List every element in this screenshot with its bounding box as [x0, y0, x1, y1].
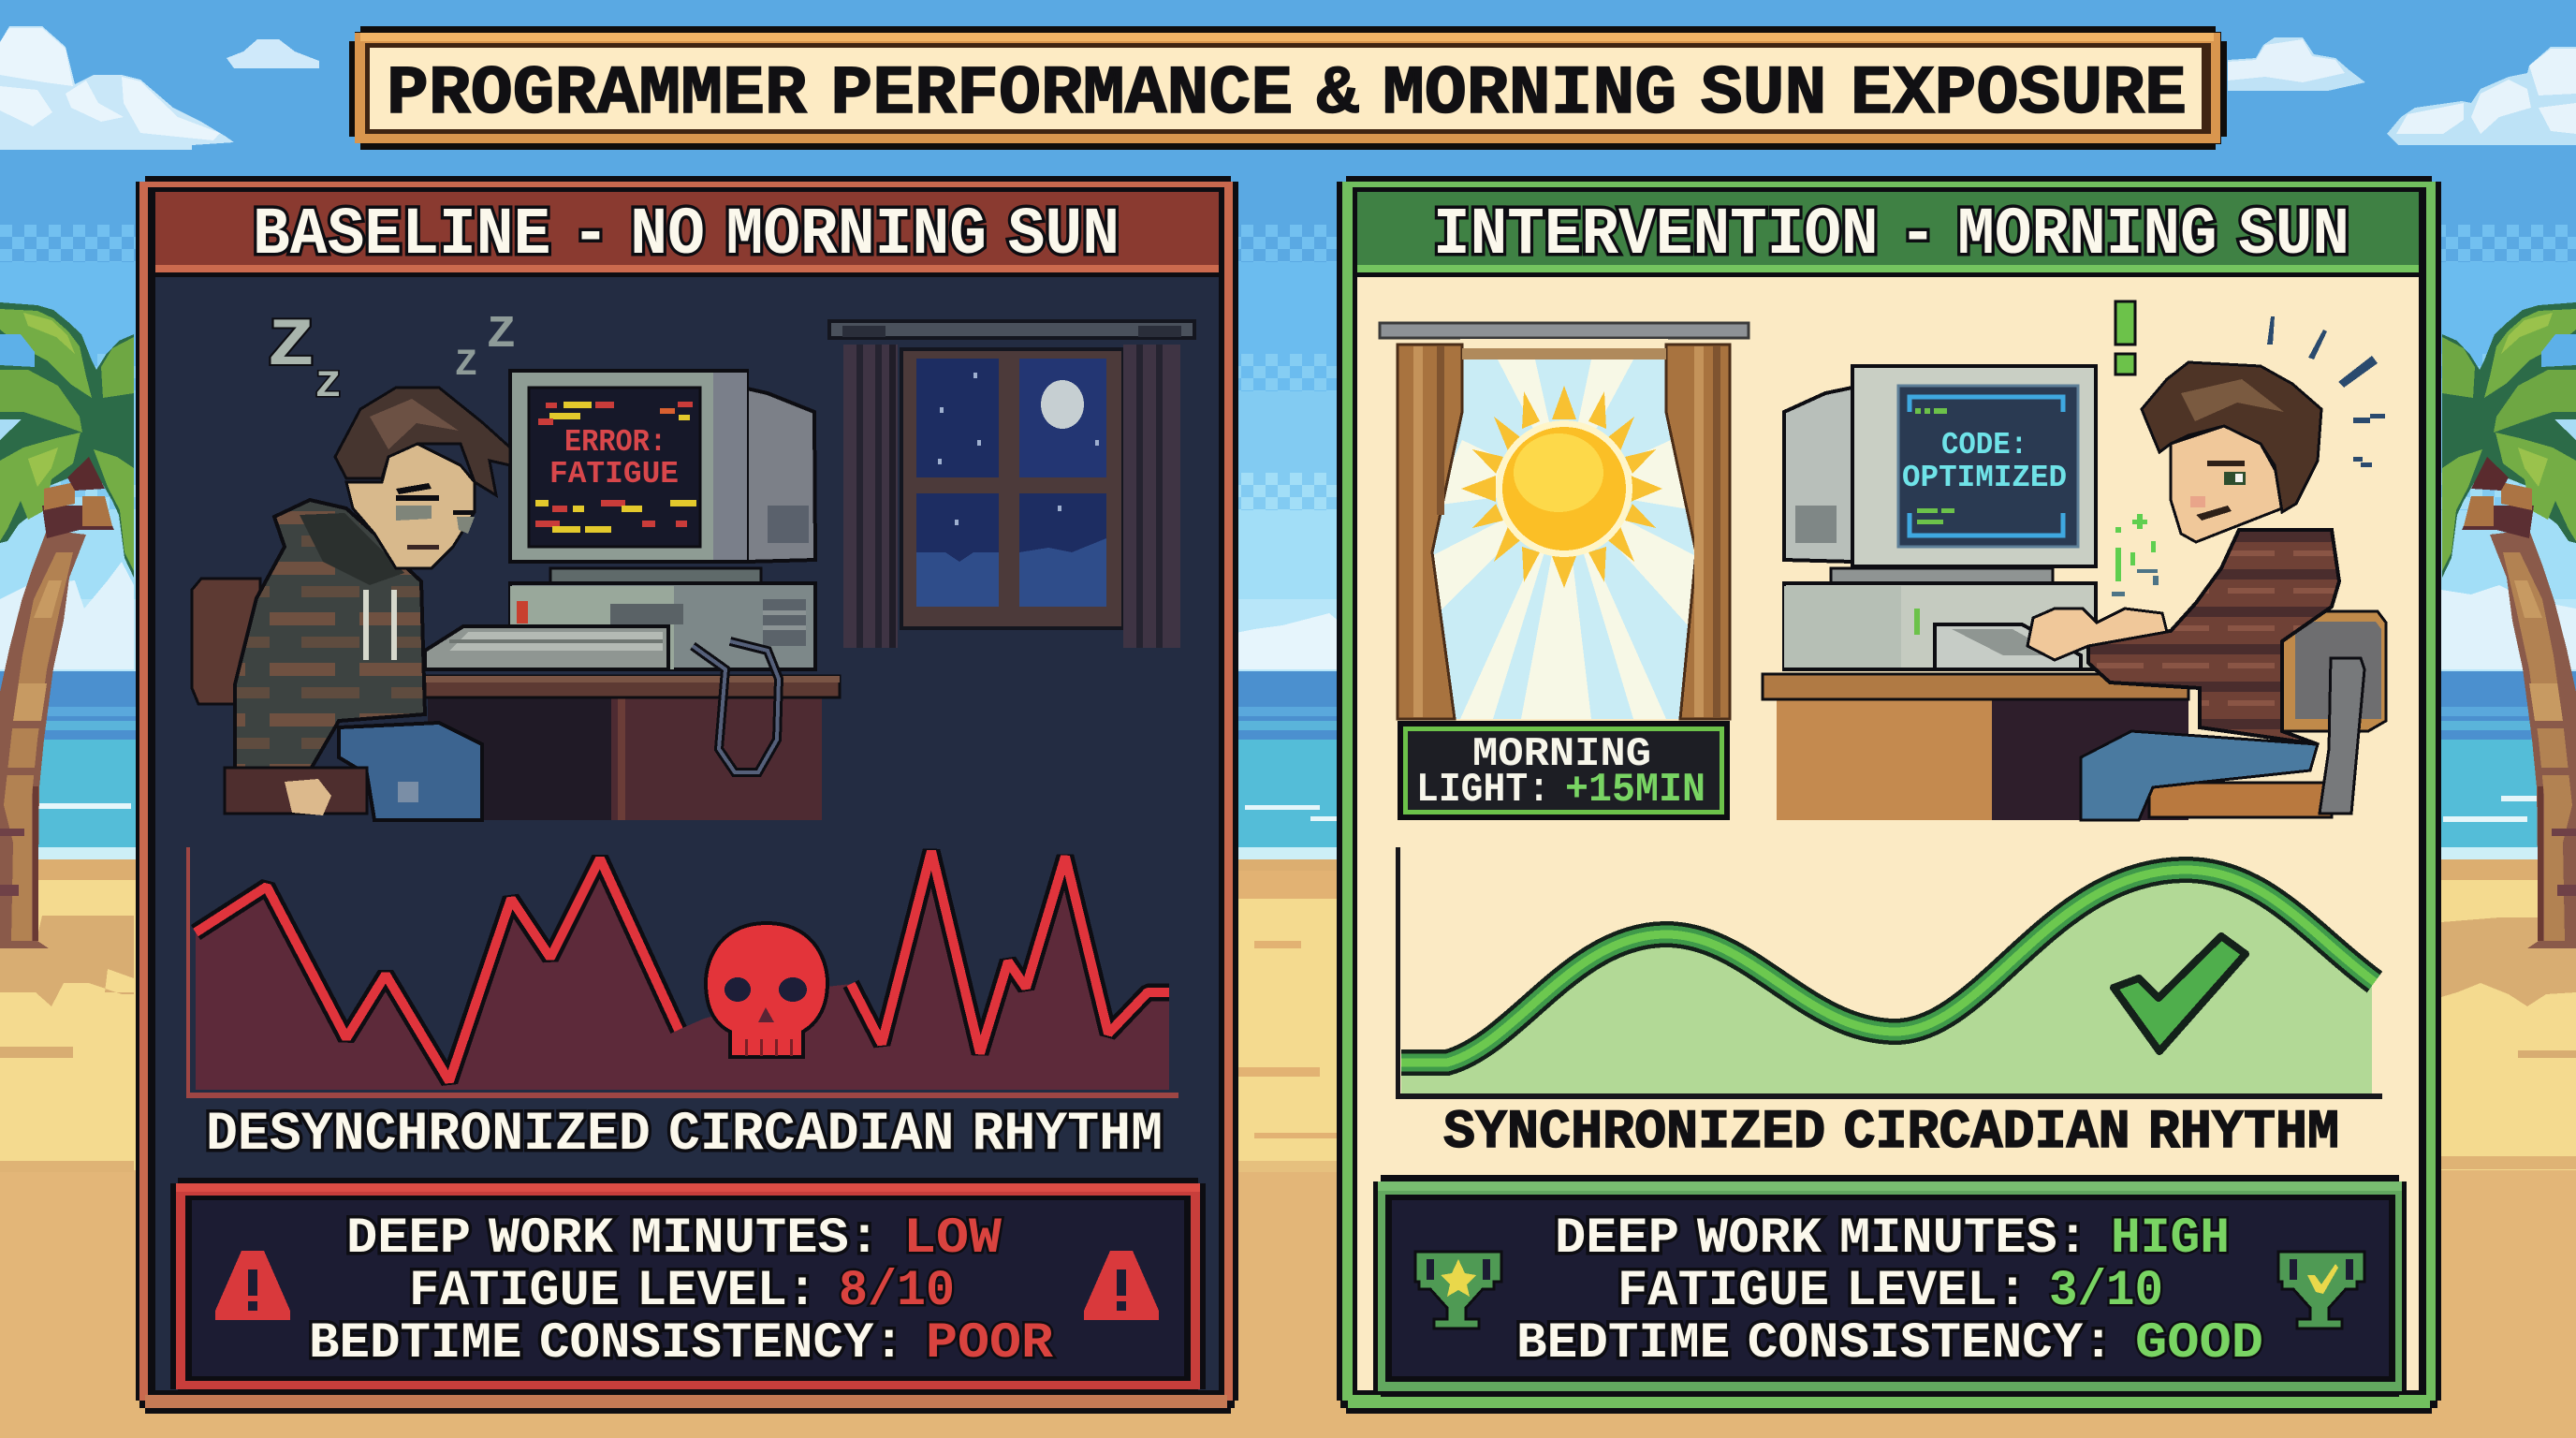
- stat: deep work high: DEEP WORK MINUTES:: [1555, 1211, 2088, 1268]
- computer tower: intervention: [1784, 568, 2096, 669]
- palm tree: left: [0, 302, 134, 948]
- panel header: baseline: [155, 192, 1219, 277]
- chart: synchronized rhythm: [1396, 847, 2382, 1099]
- screen text: error fatigue: [549, 425, 679, 492]
- chart caption: synchronized: SYNCHRONIZED CIRCADIAN RHYTHM: [1443, 1103, 2339, 1164]
- screen text: code optimized: CODE:: [1941, 428, 2027, 462]
- desk: intervention: [1763, 674, 2188, 820]
- panel: intervention - morning sun: [1337, 176, 2441, 1414]
- monitor: code optimized: [1784, 366, 2096, 566]
- stat: bedtime poor: BEDTIME CONSISTENCY:: [309, 1315, 904, 1372]
- icon: trophy star: [1415, 1252, 1501, 1328]
- sleep z letters: Z: [455, 345, 477, 387]
- screen text: error fatigue: ERROR:: [564, 425, 666, 460]
- cloud: top right large: [2387, 47, 2576, 145]
- icon: skull: [706, 923, 827, 1057]
- header text: intervention: INTERVENTION - MORNING SUN: [1433, 198, 2349, 273]
- cloud: top left large: [0, 26, 234, 150]
- cloud: top left small: [227, 39, 319, 68]
- sleep z letters: [268, 308, 516, 408]
- stat: bedtime good: BEDTIME CONSISTENCY:: [1516, 1315, 2114, 1372]
- stat: deep work low: LOW: [903, 1211, 1003, 1268]
- title text: PROGRAMMER PERFORMANCE & MORNING SUN EXPOSURE: [387, 55, 2187, 133]
- monitor: error fatigue: [510, 371, 815, 562]
- stat: fatigue 3/10: 3/10: [2049, 1263, 2163, 1320]
- title banner: [349, 26, 2227, 150]
- chart: desynchronized rhythm: [186, 847, 1178, 1098]
- window with sun: [1380, 323, 1749, 719]
- computer tower: baseline: [510, 568, 815, 669]
- label: morning light +15min: LIGHT:: [1416, 767, 1550, 814]
- keyboard: baseline: [425, 626, 668, 669]
- motion lines: [2267, 316, 2385, 467]
- stat: bedtime good: GOOD: [2135, 1315, 2263, 1372]
- stat: deep work high: HIGH: [2111, 1211, 2230, 1268]
- label: morning light +15min: MORNING: [1472, 731, 1651, 778]
- icon: warning left: [215, 1251, 290, 1320]
- stat: bedtime poor: POOR: [926, 1315, 1054, 1372]
- window at night: [829, 321, 1194, 648]
- desk: baseline: [425, 676, 840, 820]
- stats box: intervention: [1373, 1175, 2407, 1397]
- cable: [693, 641, 779, 772]
- icon: warning right: [1084, 1251, 1159, 1320]
- panel: baseline - no morning sun: [136, 176, 1238, 1414]
- palm tree: right: [2442, 302, 2576, 948]
- header text: baseline: BASELINE - NO MORNING SUN: [253, 198, 1120, 273]
- green code sparkles: [2112, 514, 2159, 596]
- stat: deep work low: DEEP WORK MINUTES:: [346, 1211, 880, 1268]
- screen text: code optimized: OPTIMIZED: [1902, 461, 2067, 495]
- label: morning light +15min: [1398, 721, 1730, 820]
- stats box: baseline: [170, 1178, 1206, 1395]
- programmer: energized: [2027, 362, 2386, 820]
- panel header: intervention: [1357, 192, 2419, 277]
- label: morning light +15min: +15MIN: [1565, 767, 1705, 814]
- icon: checkmark: [2114, 936, 2246, 1051]
- icon: sun: [1461, 386, 1662, 588]
- screen text: error fatigue: FATIGUE: [549, 457, 679, 492]
- stat: fatigue 3/10: FATIGUE LEVEL:: [1617, 1263, 2027, 1320]
- icon: trophy check: [2278, 1252, 2364, 1328]
- stat: fatigue 8/10: 8/10: [839, 1263, 955, 1320]
- sleep z letters: Z: [315, 366, 341, 408]
- icon: green exclamation: [2115, 301, 2135, 374]
- sleep z letters: Z: [487, 310, 516, 360]
- cloud: top right small: [2228, 37, 2365, 91]
- programmer: tired: [192, 388, 510, 820]
- keyboard: intervention: [1935, 624, 2081, 669]
- screen text: code optimized: [1902, 428, 2067, 495]
- stat: fatigue 8/10: FATIGUE LEVEL:: [409, 1263, 817, 1320]
- chart caption: desynchronized: DESYNCHRONIZED CIRCADIAN RHYTHM: [206, 1105, 1163, 1166]
- sleep z letters: Z: [268, 308, 315, 385]
